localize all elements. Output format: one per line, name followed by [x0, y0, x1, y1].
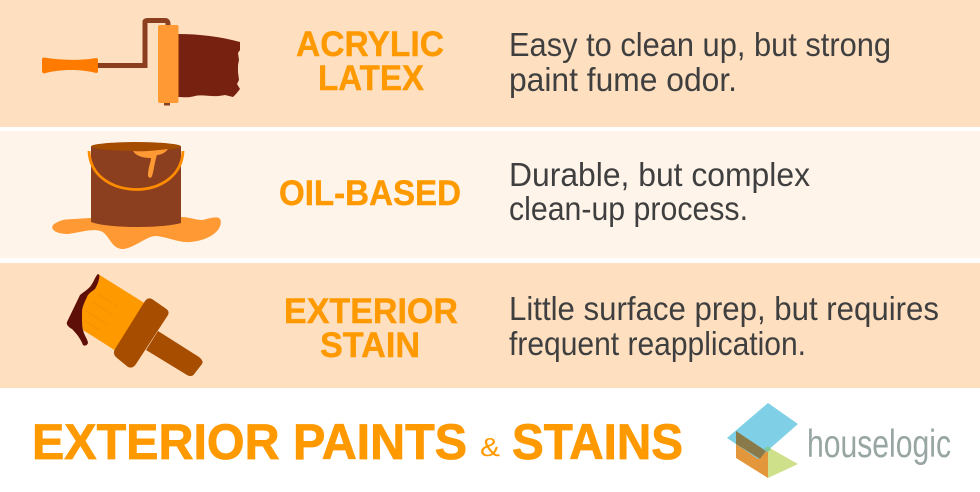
text: oil-based description: Durable, but complex [509, 156, 810, 193]
icon: houselogic mark [727, 403, 798, 478]
icon: paint can on puddle [52, 142, 221, 249]
panel: oil-based [0, 131, 980, 258]
text: exterior stain description: frequent reapplication. [509, 325, 806, 362]
heading: exterior stain: EXTERIOR [284, 292, 458, 331]
heading: oil-based: OIL-BASED [279, 174, 461, 213]
heading: acrylic latex: ACRYLIC [296, 25, 444, 64]
title [32, 414, 683, 470]
panel: acrylic latex [0, 0, 980, 127]
icon: paint brush [67, 274, 203, 376]
text: oil-based description [509, 156, 810, 227]
panel: exterior stain [0, 263, 980, 388]
text: acrylic description: Easy to clean up, but strong [509, 26, 891, 63]
title: & [480, 432, 500, 462]
icon: paint roller [42, 20, 240, 106]
heading: acrylic latex [296, 25, 444, 98]
text: acrylic description [509, 26, 891, 98]
heading: exterior stain [284, 292, 458, 365]
text: acrylic description: paint fume odor. [509, 61, 737, 98]
text: exterior stain description [509, 290, 939, 362]
text: exterior stain description: Little surface prep, but requires [509, 290, 939, 327]
title: STAINS [512, 414, 683, 470]
text: oil-based description: clean-up process. [509, 190, 748, 227]
heading: acrylic latex: LATEX [318, 59, 425, 98]
logo: houselogic [727, 403, 951, 478]
heading: exterior stain: STAIN [320, 326, 420, 365]
title: EXTERIOR PAINTS [32, 414, 467, 470]
